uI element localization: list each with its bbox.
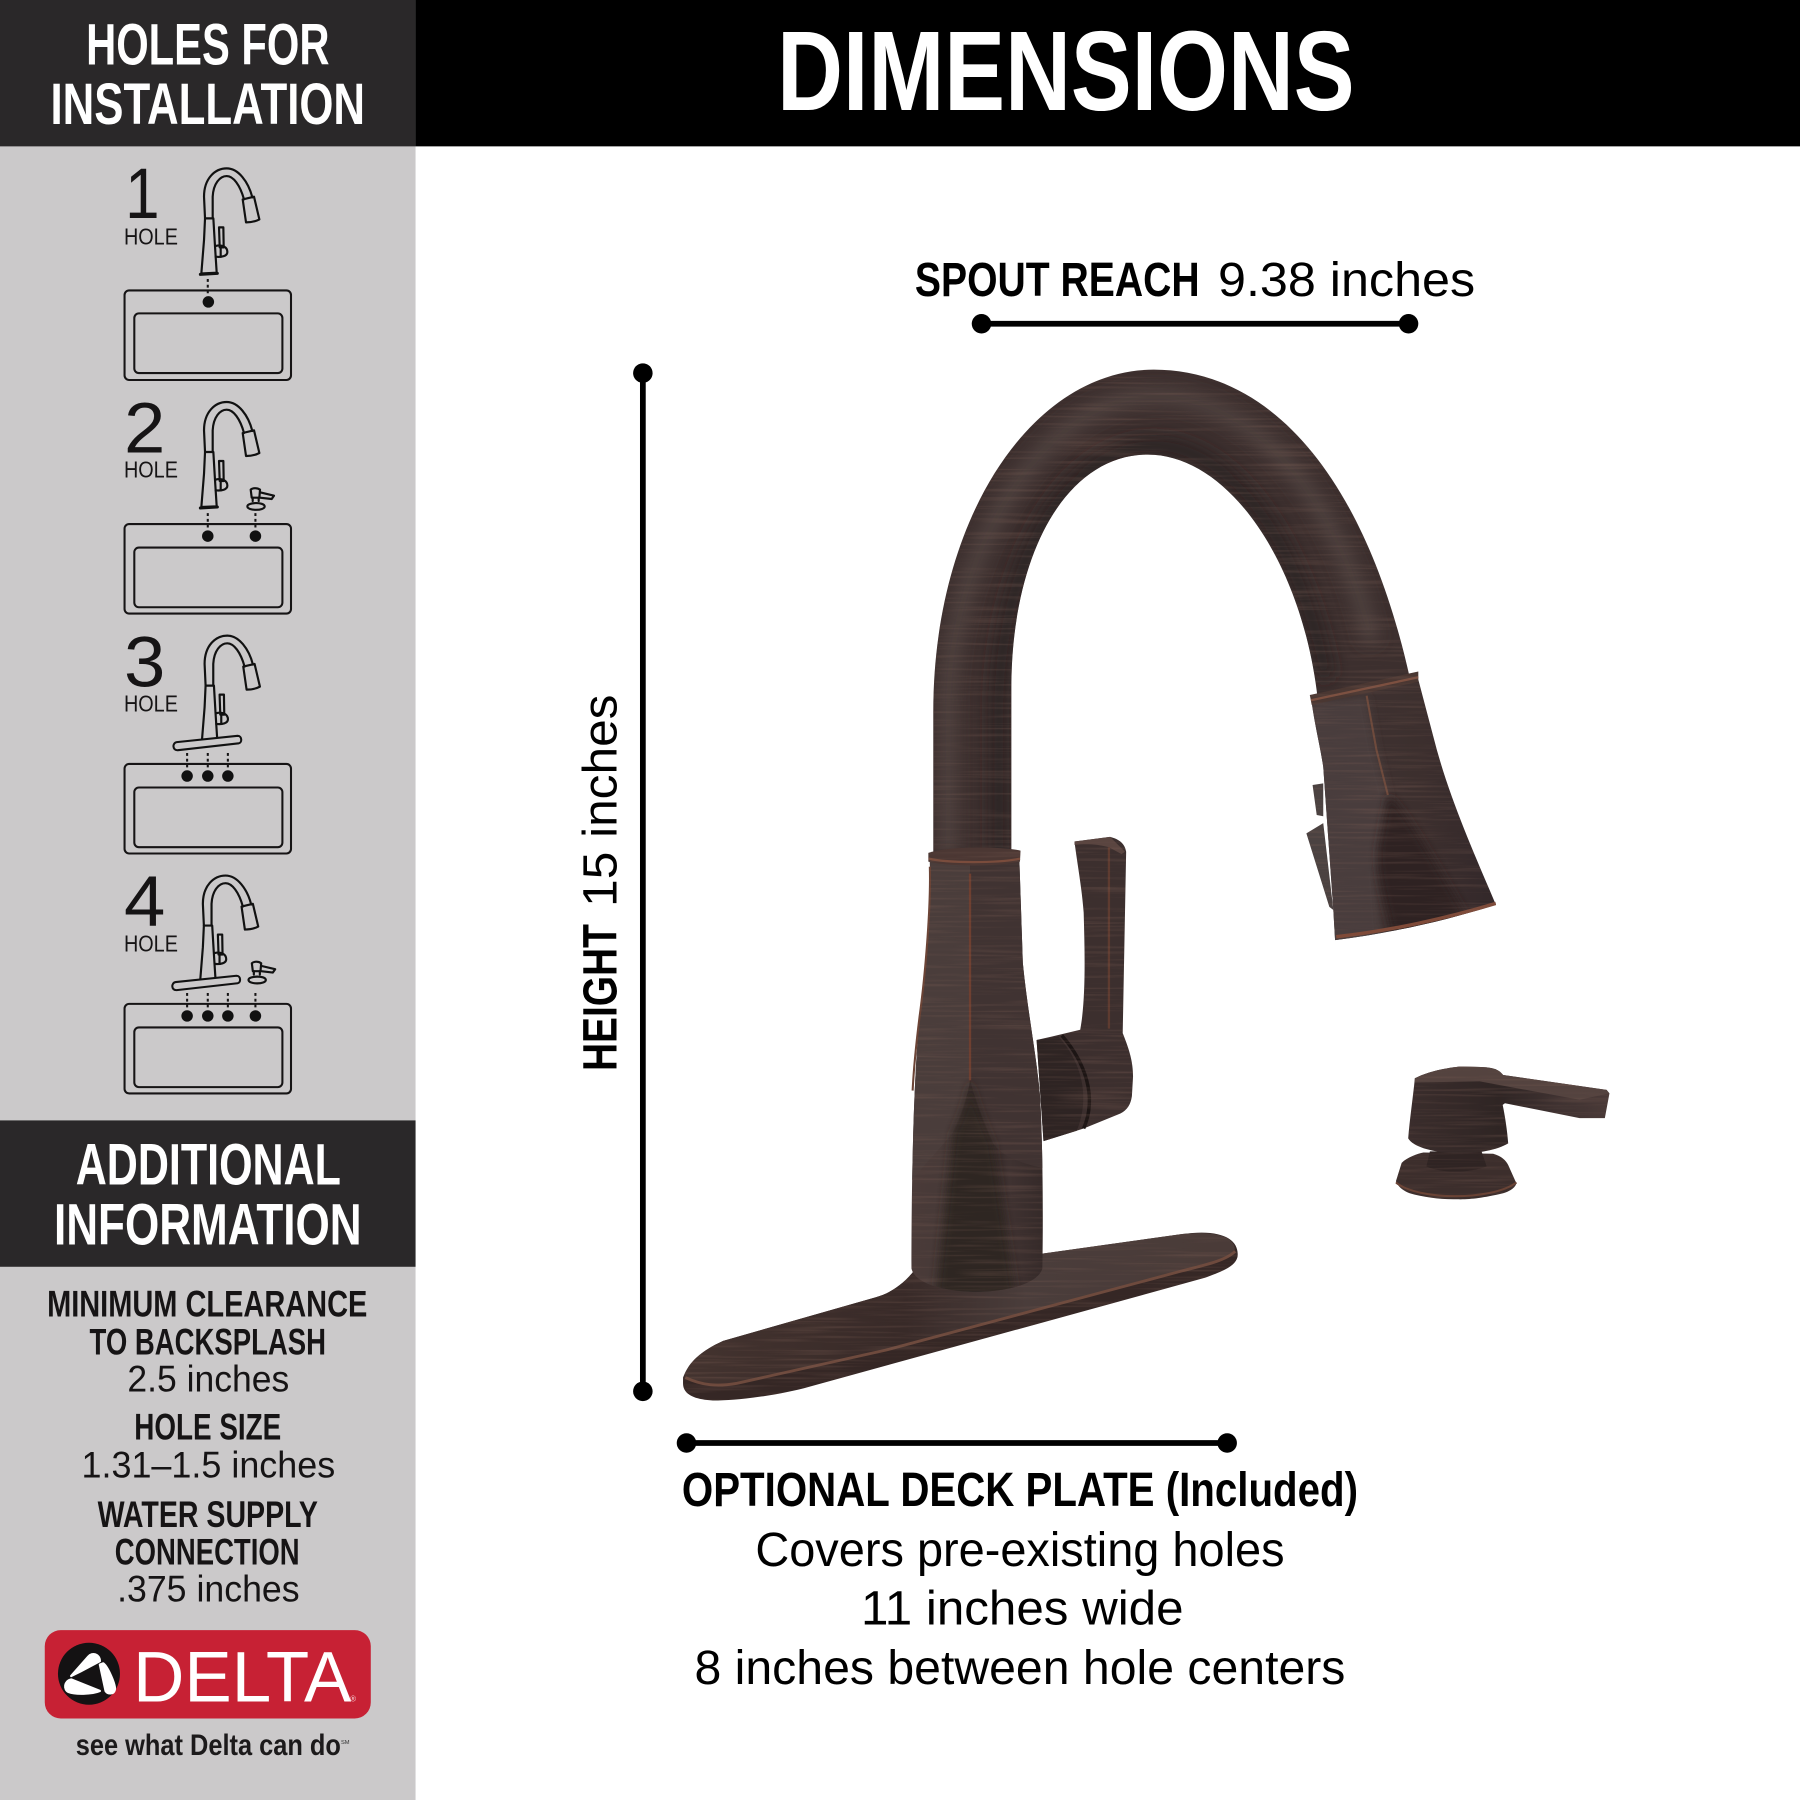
text block: water supply connection: CONNECTION (115, 1532, 300, 1573)
dimension: height: HEIGHT (573, 924, 627, 1071)
image: faucet (683, 370, 1496, 1401)
title: dimensions: DIMENSIONS (777, 8, 1355, 135)
icon: 3 hole option: HOLE (124, 691, 178, 717)
text block: water supply connection (98, 1494, 318, 1609)
icon: 1 hole option: 1 (125, 155, 160, 234)
heading: additional information: INFORMATION (54, 1192, 362, 1257)
text block: optional deck plate: 8 inches between hole centers (695, 1641, 1345, 1695)
heading: additional information (0, 1120, 416, 1267)
tagline: see what Delta can do (76, 1729, 341, 1762)
logo: Delta: ® (350, 1694, 356, 1703)
text block: minimum clearance: MINIMUM CLEARANCE (47, 1284, 367, 1325)
faucet spout (933, 370, 1410, 855)
heading: additional information: ADDITIONAL (76, 1133, 341, 1198)
dimension: spout reach: 9.38 inches (1218, 253, 1475, 307)
logo: Delta (45, 1630, 371, 1718)
dimension: spout reach (915, 253, 1475, 333)
text block: optional deck plate: OPTIONAL DECK PLATE (Included) (682, 1463, 1358, 1517)
dimension: deck plate width line (677, 1433, 1237, 1453)
heading: holes for installation (0, 0, 416, 146)
icon: 2 hole option: 2 (124, 389, 165, 468)
icon: 4 hole option: 4 (124, 862, 165, 941)
text block: hole size: HOLE SIZE (134, 1407, 281, 1448)
tagline: SM (341, 1740, 350, 1746)
faucet deck plate (683, 1233, 1238, 1401)
text block: minimum clearance (47, 1284, 367, 1399)
text block: hole size (82, 1407, 335, 1485)
icon: 3 hole option (124, 623, 291, 854)
text block: optional deck plate (682, 1463, 1358, 1695)
icon: 2 hole option: HOLE (124, 457, 178, 483)
text block: hole size: 1.31–1.5 inches (82, 1444, 335, 1485)
icon: 2 hole option (124, 389, 291, 614)
icon: 4 hole option: HOLE (124, 931, 178, 957)
text block: optional deck plate: 11 inches wide (861, 1581, 1184, 1635)
icon: 1 hole option: HOLE (124, 224, 178, 250)
panel: left sidebar (0, 0, 416, 1800)
text block: minimum clearance: TO BACKSPLASH (90, 1322, 326, 1363)
text block: optional deck plate: Covers pre-existing holes (755, 1523, 1285, 1577)
faucet body (911, 848, 1043, 1292)
dimension: spout reach: SPOUT REACH (915, 253, 1200, 307)
text block: water supply connection: WATER SUPPLY (98, 1494, 318, 1535)
heading: holes for installation: INSTALLATION (51, 72, 365, 137)
icon: 1 hole option (124, 155, 291, 380)
heading: holes for installation: HOLES FOR (86, 12, 329, 77)
text block: water supply connection: .375 inches (117, 1568, 300, 1609)
text block: minimum clearance: 2.5 inches (127, 1358, 289, 1399)
title: dimensions (416, 0, 1800, 146)
icon: 4 hole option (124, 862, 291, 1093)
dimension: height: 15 inches (573, 695, 627, 907)
dimension: height (573, 363, 653, 1401)
logo: Delta: DELTA (133, 1638, 352, 1717)
icon: 3 hole option: 3 (124, 623, 165, 702)
faucet lever handle (1037, 837, 1133, 1141)
image: soap dispenser (1396, 1066, 1609, 1199)
faucet spray head (1306, 672, 1496, 953)
